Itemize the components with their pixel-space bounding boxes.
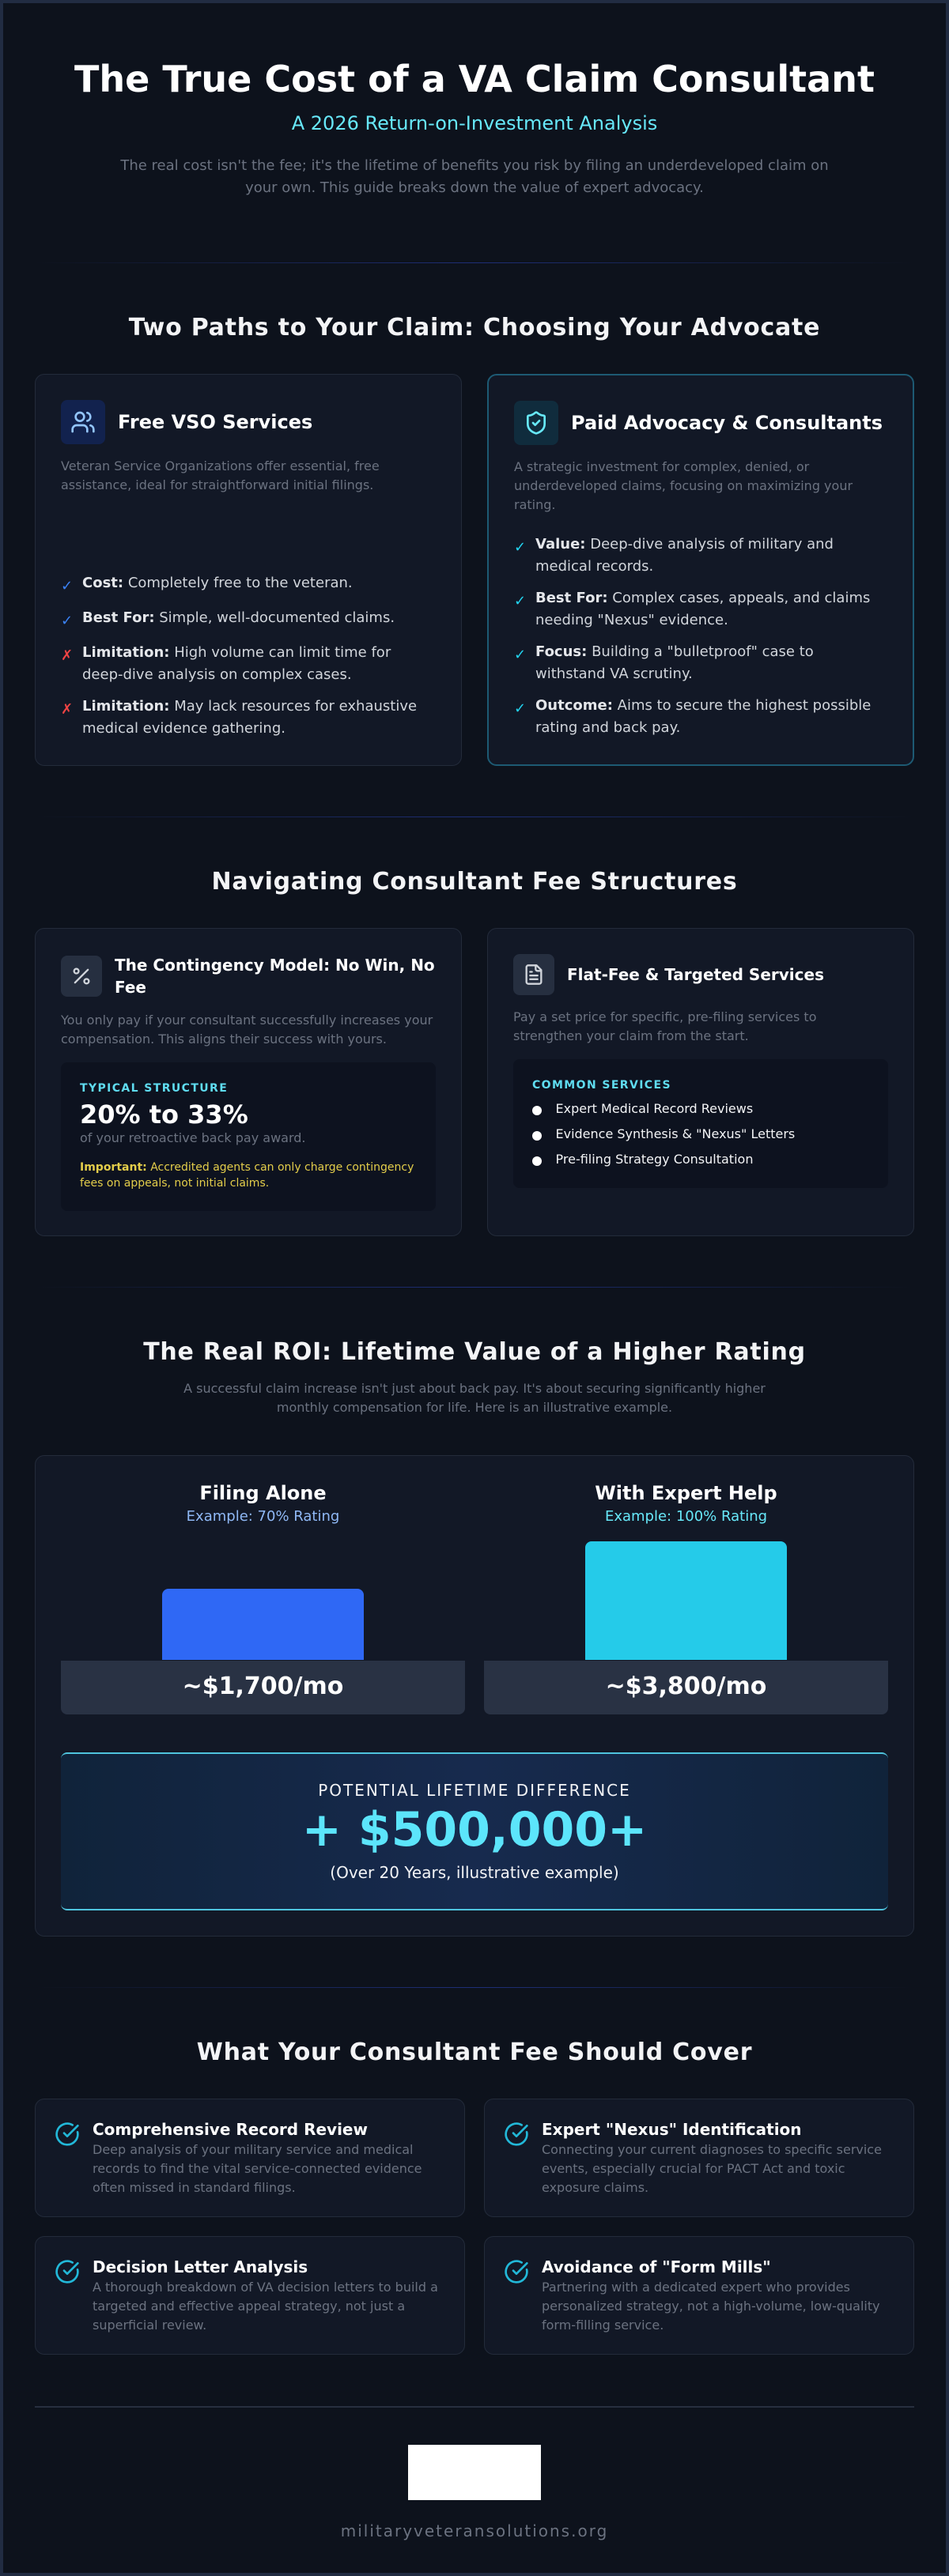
value caption: of your retroactive back pay award. [80,1130,306,1145]
value: lifetime difference: + $500,000+ [302,1802,647,1858]
sublabel: 70 percent: Example: 70% Rating [187,1508,339,1525]
ROI intro text: A successful claim increase isn't just about back pay. It's about securing significantly higher [183,1381,766,1396]
label: typical structure: TYPICAL STRUCTURE [80,1082,228,1095]
panel: expert nexus identification [484,2099,914,2217]
card title: Expert "Nexus" Identification [542,2120,802,2139]
panel: free VSO services: ✓ [61,613,73,629]
important note: fees on appeals, not initial claims. [80,1177,269,1190]
value: filing alone [61,1661,465,1714]
description: free VSO: assistance, ideal for straightforward initial filings. [61,477,373,492]
icon: check circle [505,2260,528,2284]
list item: best for: needing "Nexus" evidence. [535,612,728,628]
label: filing alone: Filing Alone [199,1482,327,1504]
description: contingency: compensation. This aligns their success with yours. [61,1032,387,1047]
sublabel: 100 percent: Example: 100% Rating [605,1508,767,1525]
list item: best for [514,590,870,628]
label: common services: COMMON SERVICES [532,1079,671,1092]
list item: best for: Best For: Complex cases, appeals, and claims [535,590,870,606]
panel: paid advocacy: ✓ [514,647,526,663]
value: expert help [484,1661,888,1714]
list item: limitation one: Limitation: High volume can limit time for [82,644,391,661]
callout: lifetime difference [61,1752,888,1910]
heading: what fee covers: What Your Consultant Fee Should Cover [197,2039,752,2066]
description: paid advocacy: rating. [514,497,555,512]
heading: paid advocacy: Paid Advocacy & Consultants [571,412,883,434]
description: flat fee: strengthen your claim from the start. [513,1028,749,1043]
card text: records to find the vital service-connected evidence [93,2161,422,2176]
panel: paid advocacy [487,374,914,766]
panel: free VSO services: ✓ [61,578,73,594]
card text: events, especially crucial for PACT Act and toxic [542,2161,845,2176]
title: The True Cost of a VA Claim Consultant [74,58,875,100]
subtitle: A 2026 Return-on-Investment Analysis [292,112,657,134]
icon: users [61,400,105,444]
value: filing alone: ~$1,700/mo [183,1673,343,1700]
bar: expert help [585,1541,787,1660]
list item: cost: Cost: Completely free to the veteran. [82,575,353,591]
heading: contingency model [115,956,435,997]
list item: focus: Focus: Building a "bulletproof" case to [535,643,814,660]
bar: filing alone [162,1589,364,1660]
icon: shield check [514,401,558,445]
important note: Important: Accredited agents can only charge contingency [80,1161,414,1174]
list item: limitation two: medical evidence gathering. [82,720,285,737]
description: flat fee [513,1009,816,1043]
heading: flat fee: Flat-Fee & Targeted Services [567,965,824,984]
description: paid advocacy: underdeveloped claims, focusing on maximizing your [514,478,853,493]
card title: Comprehensive Record Review [93,2120,368,2139]
list item: outcome: rating and back pay. [535,719,680,736]
list item: best for: Best For: Simple, well-documented claims. [82,609,395,626]
description: paid advocacy [514,459,853,512]
heading: contingency model: Fee [115,978,146,997]
service item: Expert Medical Record Reviews [555,1101,753,1116]
panel: free VSO services: ✗ [61,647,73,664]
footer website: militaryveteransolutions.org [341,2521,608,2540]
important note [80,1161,414,1190]
card text: targeted and effective appeal strategy, not just a [93,2299,405,2314]
panel: avoidance of form mills [484,2236,914,2355]
card text: Deep analysis of your military service and medical [93,2142,413,2157]
card text [542,2142,882,2195]
intro text: The real cost isn't the fee; it's the lifetime of benefits you risk by filing an underdeveloped claim on [120,157,829,174]
list item: limitation two: Limitation: May lack resources for exhaustive [82,698,417,715]
card title: Avoidance of "Form Mills" [542,2257,771,2276]
card text: superficial review. [93,2318,206,2333]
intro text [120,157,829,196]
callout: typical structure [61,1062,436,1211]
list item: limitation one [61,644,391,683]
list item: value: medical records. [535,558,653,575]
footer logo placeholder [408,2445,541,2500]
icon: percent [61,956,102,997]
list item: value: Value: Deep-dive analysis of military and [535,536,834,553]
panel: paid advocacy: ✓ [514,700,526,717]
panel: free VSO services: ✗ [61,701,73,718]
description: free VSO [61,458,380,492]
ROI intro text [183,1381,766,1415]
list item: outcome [514,697,871,736]
list item: outcome: Outcome: Aims to secure the highest possible [535,697,871,714]
card text: form-filling service. [542,2318,664,2333]
panel: contingency model [35,928,462,1236]
heading: real ROI: The Real ROI: Lifetime Value of a Higher Rating [143,1338,806,1366]
ROI intro text: monthly compensation for life. Here is an illustrative example. [277,1400,672,1415]
description: flat fee: Pay a set price for specific, pre-filing services to [513,1009,816,1024]
label: lifetime difference: POTENTIAL LIFETIME DIFFERENCE [318,1781,631,1800]
label: expert help: With Expert Help [595,1482,777,1504]
card text: A thorough breakdown of VA decision letters to build a [93,2280,438,2295]
value: expert help: ~$3,800/mo [606,1673,766,1700]
list item: focus: withstand VA scrutiny. [535,666,693,682]
description: free VSO: Veteran Service Organizations offer essential, free [61,458,380,473]
description: paid advocacy: A strategic investment for complex, denied, or [514,459,809,474]
callout: common services [513,1059,888,1188]
description: contingency [61,1013,433,1047]
panel: ROI comparison [35,1455,914,1937]
list item: limitation two [61,698,417,737]
icon: document [513,954,554,995]
panel: decision letter analysis [35,2236,465,2355]
card text: personalized strategy, not a high-volume, low-quality [542,2299,880,2314]
list item: focus [514,643,814,682]
heading: fee structures: Navigating Consultant Fee Structures [211,868,737,896]
heading: contingency model: The Contingency Model: No Win, No [115,956,435,975]
service item: Pre-filing Strategy Consultation [555,1152,753,1167]
icon: check circle [505,2122,528,2146]
list item: value [514,536,834,575]
service item: Evidence Synthesis & "Nexus" Letters [555,1126,795,1141]
card text: Connecting your current diagnoses to specific service [542,2142,882,2157]
card text [93,2280,438,2333]
heading: two paths: Two Paths to Your Claim: Choosing Your Advocate [129,314,820,341]
value: fee range: 20% to 33% [80,1099,248,1130]
panel: paid advocacy: ✓ [514,539,526,556]
card text [93,2142,422,2195]
card text: exposure claims. [542,2180,648,2195]
icon: check circle [55,2260,79,2284]
panel: paid advocacy: ✓ [514,593,526,609]
heading: free VSO services: Free VSO Services [118,411,312,433]
card text [542,2280,880,2333]
icon: check circle [55,2122,79,2146]
list item: limitation one: deep-dive analysis on complex cases. [82,666,352,683]
card title: Decision Letter Analysis [93,2257,308,2276]
caption: lifetime difference: (Over 20 Years, illustrative example) [330,1863,619,1882]
description: contingency: You only pay if your consultant successfully increases your [61,1013,433,1028]
panel: comprehensive record review [35,2099,465,2217]
card text: Partnering with a dedicated expert who provides [542,2280,850,2295]
panel: free VSO services [35,374,462,766]
panel: flat fee [487,928,914,1236]
card text: often missed in standard filings. [93,2180,296,2195]
intro text: your own. This guide breaks down the value of expert advocacy. [245,179,704,196]
